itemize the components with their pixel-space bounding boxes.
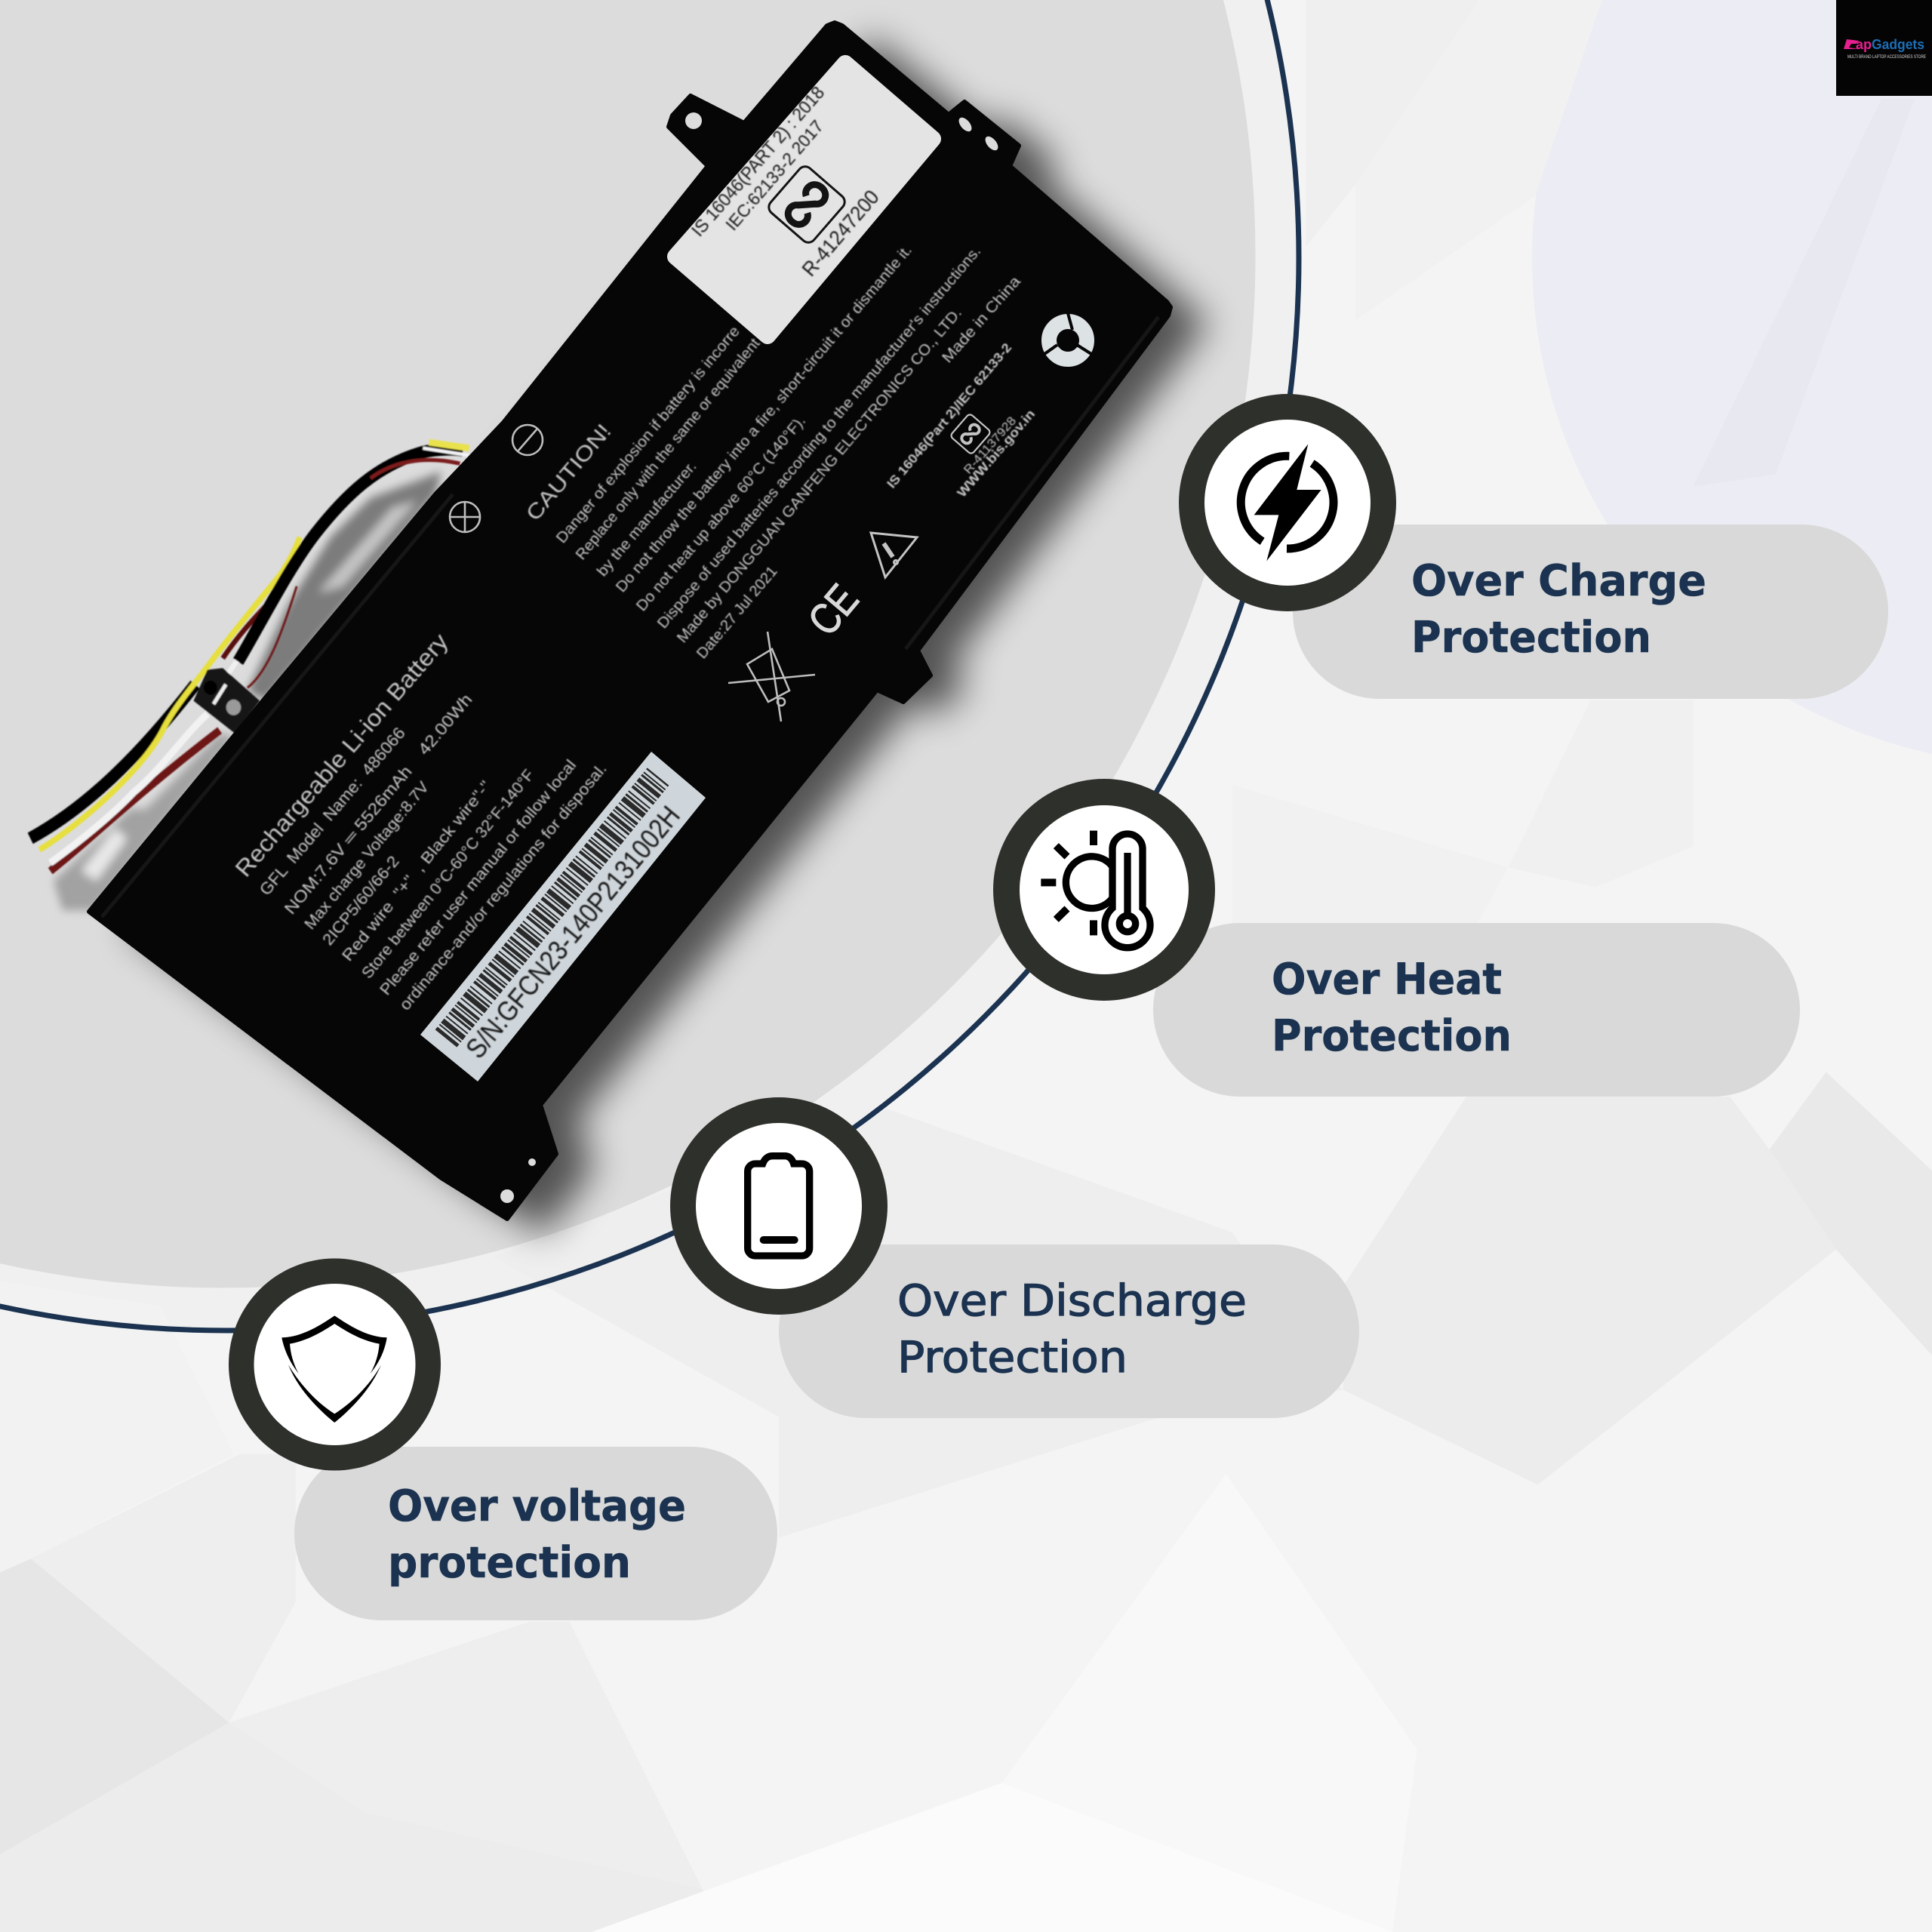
caution text: Made by DONGGUAN GANFENG ELECTRONICS CO., LTD. [674,305,965,646]
mounting holes [500,112,1001,1203]
battery specification text: Store between 0°C-60°C 32°F-140°F [358,766,538,982]
warning triangle symbol [871,533,917,577]
battery specification text: Please refer user manual or follow local [377,757,580,998]
brand logo [1836,0,1932,96]
icon badge: shield [229,1259,441,1470]
pill: over charge protection: Over Charge [1411,556,1706,606]
caution text: Do not heat up above 60°C (140°F). [633,413,809,614]
icon badge: sun and thermometer [993,779,1215,1001]
battery specification text: Max charge Voltage:8.7V [301,778,432,933]
caution text: Made in China [939,272,1024,366]
battery shadow [127,38,1208,1234]
battery specification text: GFL Model Name: 486066 [256,724,409,899]
BIS mark [766,164,848,245]
caution text: by the manufacturer. [594,458,700,580]
edge highlights [102,317,1158,917]
pill: over charge protection: Protection [1411,613,1651,663]
icon badge: low battery [670,1097,888,1315]
pill: over voltage protection: protection [388,1538,631,1588]
sticker text: R-41247200 [798,186,884,281]
logo mark [1844,39,1860,49]
sticker text: IS 16046(PART 2) : 2018 [688,83,829,241]
icon badge: charge bolt [1179,394,1396,611]
wiring harness [30,442,469,910]
caution text: IS 16046(Part 2)/IEC 62133-2 [884,340,1014,491]
pill: over heat protection: Over Heat [1272,955,1502,1004]
caution text: Replace only with the same or equivalent [573,335,764,563]
battery body [89,23,1171,1219]
serial number barcode label: S/N:GFCN23-140P2131002H [460,800,686,1064]
recycle symbol [1044,313,1091,359]
pill: over heat protection: Protection [1272,1011,1512,1061]
pill: over discharge protection: Protection [897,1333,1128,1383]
crossed-out bin symbol [728,632,815,721]
caution text [521,242,1038,662]
connecting arc line [0,0,1299,1331]
caution text: Dispose of used batteries according to the manufacturer's instructions. [654,243,984,632]
pill: over charge protection [1293,525,1888,699]
sticker text: IEC:62133-2 2017 [721,116,827,234]
small BIS mark [950,413,991,455]
caution text: Do not throw the battery into a fire, short-circuit it or dismantle it. [613,242,915,595]
logo pink letters: ap [1856,37,1872,52]
certification sticker [675,63,933,336]
large grey circle backdrop [0,0,1256,1287]
battery specification text: ordinance-and/or regulations for disposal. [396,760,611,1014]
battery specification text: Red wire "+" , Black wire"-" [339,778,495,964]
caution text: R-41137928 [961,414,1019,477]
pill: over heat protection [1153,923,1800,1097]
caution text: CAUTION! [521,420,616,525]
pill: over voltage protection: Over voltage [388,1481,686,1531]
pill: over discharge protection [779,1244,1359,1418]
logo blue letters: Gadgets [1872,37,1924,52]
cable strands [30,442,469,871]
CE mark: CE [798,575,868,645]
battery specification text: NOM:7.6V ═ 5526mAh 42.00Wh [281,690,476,918]
pill: over voltage protection [294,1447,777,1620]
battery specification text: Rechargeable Li-ion Battery [230,628,454,882]
battery specification text [230,628,611,1014]
battery image [30,23,1208,1234]
caution text: WWW.bis.gov.in [955,407,1038,500]
polarity markers [450,425,543,532]
caution text: Danger of explosion if battery is incorre [553,323,743,546]
cable gap shading [54,472,441,910]
pill: over discharge protection: Over Discharge [897,1276,1247,1326]
sticker text [688,83,884,281]
battery specification text: 2ICP5/60/66-2 [319,853,403,949]
caution text: Date:27 Jul 2021 [694,563,781,662]
